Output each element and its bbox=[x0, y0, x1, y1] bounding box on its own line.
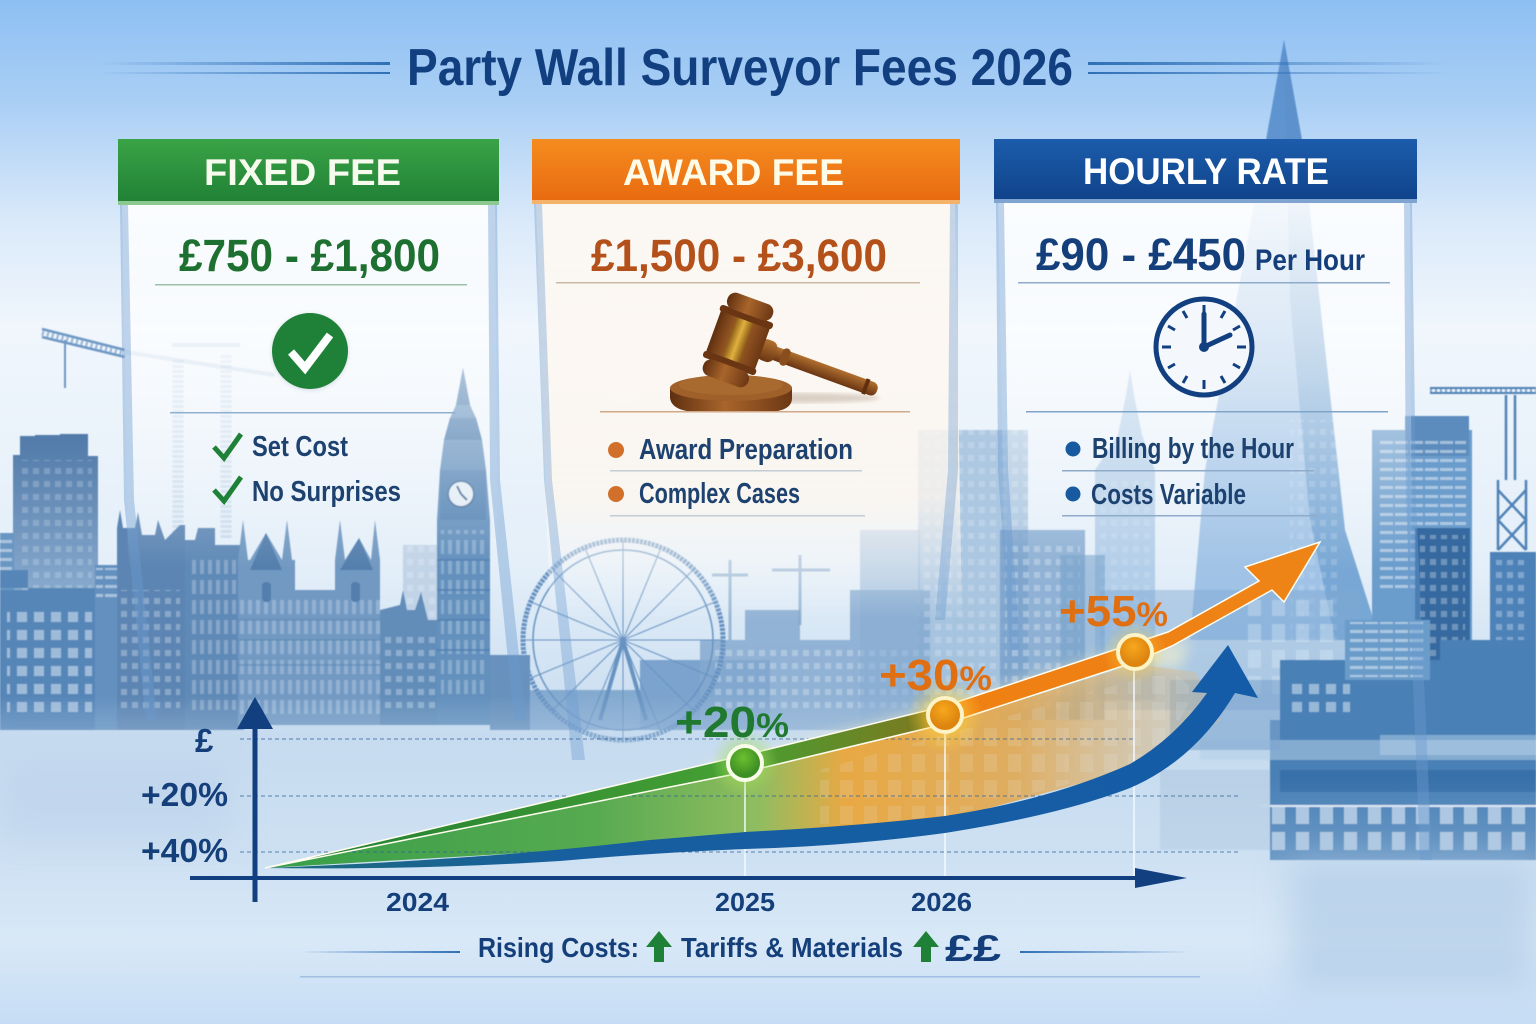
marker: +30% bbox=[879, 651, 992, 753]
london skyline bbox=[0, 329, 1028, 740]
axis labels: +40% bbox=[141, 832, 228, 869]
list: Award Preparation bbox=[639, 434, 853, 466]
panel side strips bbox=[120, 205, 526, 720]
caption: rising costs: Tariffs & Materials bbox=[681, 932, 903, 963]
list: Costs Variable bbox=[1091, 479, 1246, 511]
price: £750 - £1,800 bbox=[179, 230, 440, 281]
panel: hourly rate bbox=[994, 139, 1432, 860]
list bbox=[214, 431, 401, 508]
drop lines bbox=[745, 655, 1134, 878]
marker: +20% bbox=[675, 698, 789, 797]
marker: +20%: +20% bbox=[675, 698, 789, 747]
marker: +30%: +30% bbox=[879, 651, 992, 700]
panel side strips bbox=[996, 203, 1432, 860]
cranes bbox=[42, 329, 275, 540]
header: HOURLY RATE bbox=[1083, 151, 1329, 192]
mid city bbox=[490, 655, 530, 730]
header: AWARD FEE bbox=[623, 152, 844, 193]
panel body bbox=[122, 205, 498, 570]
title bbox=[100, 39, 1448, 97]
axis labels: +20% bbox=[141, 776, 228, 813]
right skyline bbox=[1000, 370, 1536, 860]
parliament bbox=[238, 520, 380, 725]
axis labels: 2026 bbox=[911, 887, 972, 917]
axis: vertical bbox=[237, 697, 273, 902]
axis labels: 2024 bbox=[386, 887, 450, 917]
caption: rising costs: Rising Costs: bbox=[478, 932, 639, 963]
axis labels: 2025 bbox=[715, 887, 775, 917]
area under growth line bbox=[265, 664, 1220, 868]
London Eye bbox=[523, 540, 723, 740]
title: Party Wall Surveyor Fees 2026 bbox=[407, 39, 1073, 97]
growth arrow bbox=[265, 542, 1320, 868]
panel body bbox=[536, 204, 962, 620]
low riverfront blocks bbox=[1270, 640, 1536, 860]
panel: award fee bbox=[532, 139, 962, 760]
header: FIXED FEE bbox=[204, 152, 401, 193]
list: Complex Cases bbox=[639, 478, 800, 510]
list bbox=[1062, 433, 1318, 516]
water reflection bbox=[0, 760, 1536, 990]
axis labels bbox=[141, 722, 972, 917]
panel side strips bbox=[534, 204, 958, 760]
list bbox=[608, 434, 865, 516]
panel: fixed fee bbox=[118, 139, 526, 720]
list: Set Cost bbox=[252, 431, 348, 463]
axis: horizontal bbox=[190, 868, 1187, 888]
empire-style tower bbox=[1095, 370, 1155, 700]
left of shard bbox=[1000, 530, 1085, 720]
icon: up arrow bbox=[913, 931, 939, 962]
list: Billing by the Hour bbox=[1092, 433, 1294, 465]
marker: +55%: +55% bbox=[1059, 587, 1168, 636]
icon: clock bbox=[1156, 299, 1252, 395]
icon: up arrow bbox=[646, 931, 672, 962]
price: £90 - £450 bbox=[1036, 229, 1246, 280]
blue trend arrow bbox=[265, 645, 1258, 868]
header bbox=[532, 139, 960, 204]
right towers bbox=[1372, 430, 1472, 660]
header bbox=[118, 139, 499, 205]
centre towers bbox=[918, 430, 1028, 730]
grid lines bbox=[240, 739, 1240, 852]
chart: rising fees bbox=[141, 542, 1320, 917]
price: £1,500 - £3,600 bbox=[591, 230, 887, 281]
price: Per Hour bbox=[1255, 244, 1365, 277]
price bbox=[1036, 229, 1365, 280]
list: No Surprises bbox=[252, 476, 401, 508]
the shard bbox=[1190, 40, 1380, 640]
marker: +55% bbox=[1059, 587, 1168, 684]
mid buildings bbox=[1100, 590, 1360, 710]
header bbox=[994, 139, 1417, 203]
axis labels: £ bbox=[195, 722, 214, 759]
glow above growth line bbox=[700, 640, 1190, 790]
tower A bbox=[13, 434, 98, 600]
caption: rising costs bbox=[300, 928, 1200, 978]
Big Ben bbox=[437, 368, 490, 725]
caption: rising costs: ££ bbox=[945, 928, 1002, 969]
panel body bbox=[998, 203, 1412, 570]
icon: check mark bbox=[272, 313, 348, 390]
houses of parliament annex bbox=[380, 590, 440, 725]
crane bbox=[1430, 388, 1536, 550]
icon: gavel bbox=[670, 289, 892, 432]
office blocks bbox=[117, 510, 185, 730]
low left block bbox=[0, 533, 14, 593]
pale background towers bbox=[402, 544, 437, 620]
